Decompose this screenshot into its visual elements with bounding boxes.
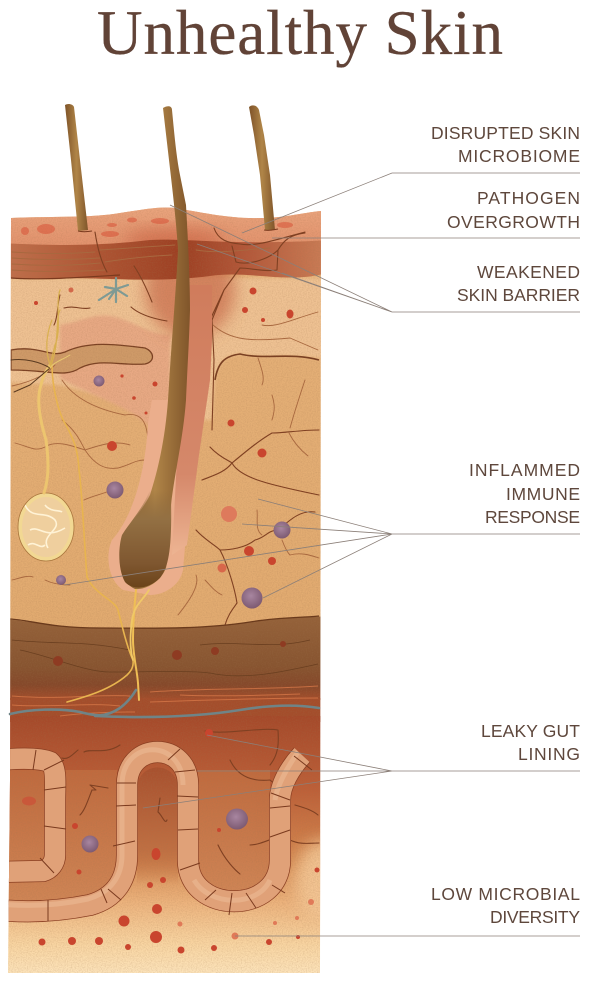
red immune cells and dots [22, 288, 320, 954]
red layer [0, 698, 330, 722]
follicle sheath [108, 285, 212, 595]
pale shading on right of gut [289, 832, 320, 914]
label: disrupted skin microbiome [242, 123, 580, 233]
sausage lobe [11, 344, 152, 373]
gland duct [39, 365, 50, 493]
right lobe outline [215, 354, 319, 380]
cracks [10, 228, 319, 874]
label: pathogen overgrowth [272, 188, 580, 238]
label: low microbial diversity [235, 884, 580, 936]
label: low microbial diversity: DIVERSITY [490, 907, 580, 927]
tube highlight [0, 750, 298, 905]
nerves [11, 290, 149, 702]
tube segment divisions [33, 749, 312, 921]
barrier band [0, 240, 330, 280]
sheath red stripe [172, 285, 212, 555]
label: leaky gut lining: LEAKY GUT [481, 721, 580, 741]
skin and gut tissue layers [8, 208, 321, 973]
label: disrupted skin microbiome: DISRUPTED SKIN [431, 123, 580, 143]
gut lining tube [0, 749, 312, 921]
label: inflamed immune response: RESPONSE [485, 507, 580, 527]
label: pathogen overgrowth: OVERGROWTH [447, 212, 580, 232]
label: weakened skin barrier [170, 205, 580, 312]
gland body [20, 495, 72, 559]
purple immune cells [56, 376, 290, 852]
striations in band [11, 245, 270, 279]
sebaceous gland [18, 365, 74, 561]
label: leaky gut lining: LINING [518, 744, 580, 764]
tube body [0, 752, 302, 911]
brown layer lines [12, 640, 318, 676]
label: pathogen overgrowth: PATHOGEN [477, 188, 580, 208]
star-shaped cell [99, 278, 128, 302]
right dermis cracks [196, 430, 319, 625]
label: inflamed immune response: IMMUNE [506, 484, 580, 504]
streaks in red layer [12, 686, 318, 716]
hair: left [65, 104, 88, 231]
red shading near hair [136, 274, 244, 342]
hair: center with bulb [119, 106, 190, 589]
label: weakened skin barrier: SKIN BARRIER [457, 285, 580, 305]
label: inflamed immune response: INFLAMMED [469, 460, 580, 480]
skin cross-section illustration [8, 104, 321, 973]
label: weakened skin barrier: WEAKENED [477, 262, 580, 282]
tube shadow [0, 752, 302, 911]
label: low microbial diversity: LOW MICROBIAL [431, 884, 580, 904]
label: inflamed immune response [64, 460, 580, 598]
boundary of brown layer [10, 616, 319, 628]
hair: right [249, 105, 275, 230]
pockets inside gut folds [0, 770, 117, 905]
label: disrupted skin microbiome: MICROBIOME [458, 146, 580, 166]
epidermis blotches [21, 218, 293, 237]
pink lobe left [60, 316, 170, 425]
upper dermis light zone [0, 278, 330, 420]
label: leaky gut lining [143, 721, 580, 808]
gut tissue [0, 716, 330, 976]
gut tissue cracks [62, 729, 319, 874]
grain overlay [0, 200, 330, 980]
title: Unhealthy Skin [97, 0, 503, 68]
skin line beneath hairs [78, 229, 278, 232]
vein and blue vessels [10, 690, 319, 717]
brown layer [0, 616, 330, 700]
epidermis top [10, 208, 321, 250]
